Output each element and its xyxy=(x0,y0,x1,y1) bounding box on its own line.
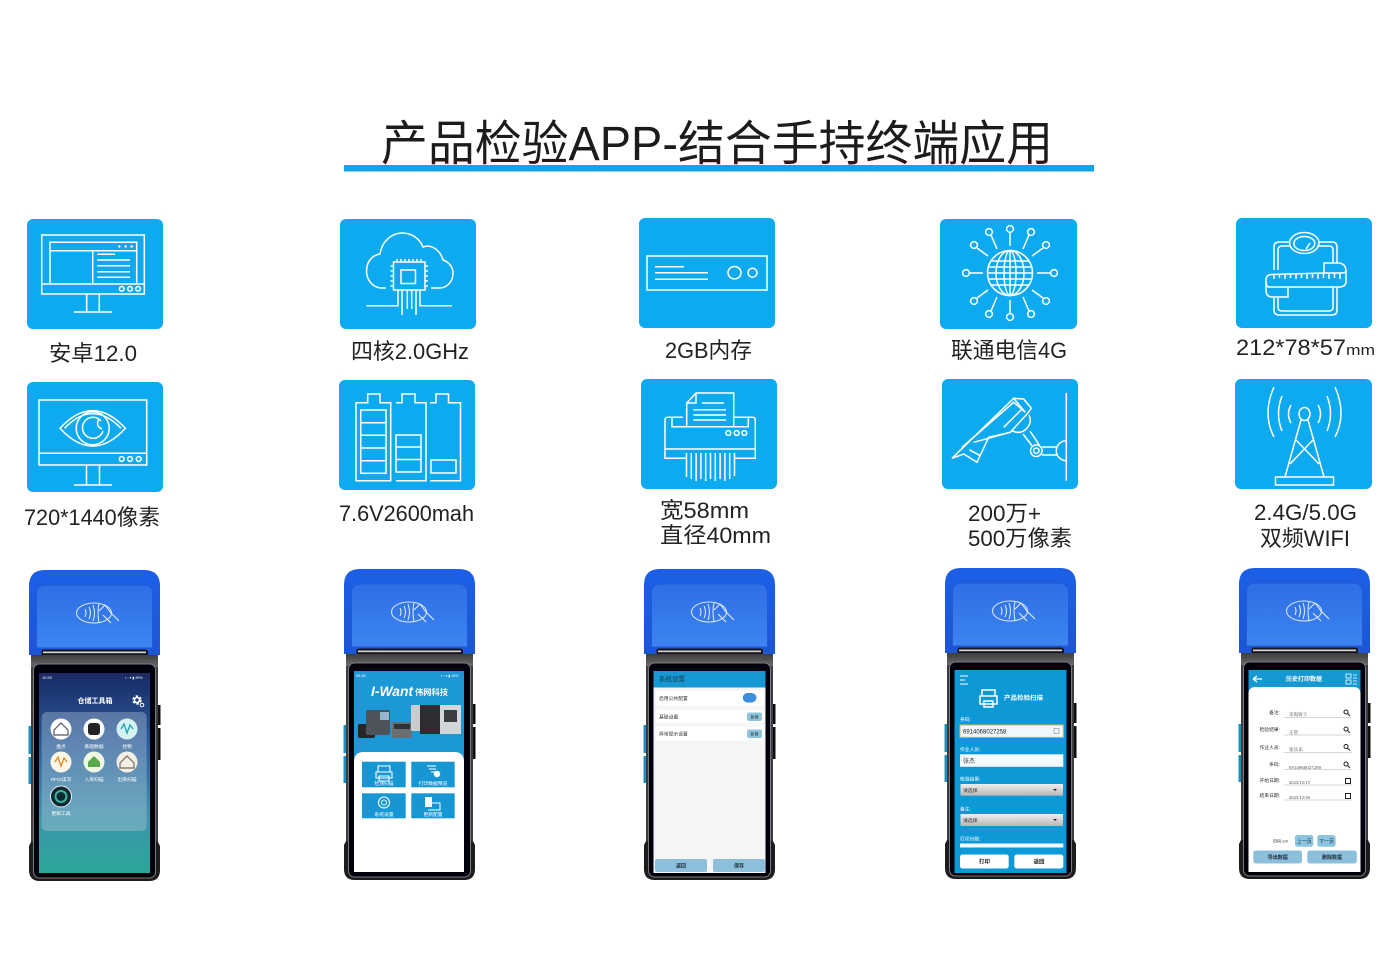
phone screen: I-Want home xyxy=(354,671,464,872)
phone screen: print history: 2023/12/30 xyxy=(1289,795,1311,800)
phone screen: print history: 条码: xyxy=(1269,761,1280,768)
phone screen: system settings: 基础设置 xyxy=(659,714,678,720)
icon: monitor with eye xyxy=(27,382,163,492)
phone screen: I-Want home: 09:38 xyxy=(356,674,366,678)
phone screen: warehouse tools: 仓储工具箱 xyxy=(78,696,112,705)
panel: cpu spec xyxy=(340,219,476,364)
phone screen: print history: 结束日期: xyxy=(1259,792,1280,799)
phone screen: system settings: 新建 xyxy=(750,730,758,736)
icon: monitor with window xyxy=(27,219,163,329)
icon: server box xyxy=(639,218,775,328)
phone screen: print history: 作业人员: xyxy=(1259,744,1280,751)
panel: android version spec xyxy=(27,219,163,366)
panel: phone 5 print history xyxy=(1238,568,1370,879)
icon: cloud chip xyxy=(340,219,476,329)
title: 产品检验APP-结合手持终端应用 xyxy=(381,118,1053,171)
phone screen: warehouse tools: 10:20 xyxy=(42,675,53,680)
label: 2.4G/5.0G xyxy=(1254,500,1357,525)
phone screen: I-Want home: 打印数据预览 xyxy=(419,780,448,787)
phone screen: product inspection scan: 张杰 xyxy=(963,757,975,765)
phone screen: I-Want home: 伟网科技 xyxy=(415,687,448,697)
icon: scale and tape xyxy=(1236,218,1372,328)
phone screen: warehouse tools xyxy=(39,673,150,873)
panel: printing spec xyxy=(641,379,777,548)
phone screen: product inspection scan: 打印 xyxy=(979,858,990,866)
phone screen: product inspection scan: 打印份数: xyxy=(960,836,981,842)
panel: network spec xyxy=(940,219,1077,363)
phone screen: print history: 乐海饼干 xyxy=(1289,711,1308,718)
phone screen: I-Want home: 系统设置 xyxy=(374,811,394,818)
panel: memory spec xyxy=(639,218,775,363)
icon: printer with paper xyxy=(641,379,777,489)
phone screen: warehouse tools: 入库扫描 xyxy=(84,776,104,783)
phone screen: print history: 删除数据 xyxy=(1322,854,1342,861)
phone screen: product inspection scan: 条码: xyxy=(960,716,971,723)
phone screen: print history: 导出数据 xyxy=(1268,854,1288,861)
label: 直径40mm xyxy=(660,523,771,548)
phone screen: print history xyxy=(1248,670,1360,872)
icon: signal tower xyxy=(1235,379,1372,489)
phone screen: warehouse tools: 基础数据 xyxy=(84,743,104,750)
phone screen: product inspection scan xyxy=(954,670,1066,873)
label: 500万像素 xyxy=(968,526,1072,551)
phone screen: system settings: 启用公共配置 xyxy=(659,695,688,702)
label: 宽58mm xyxy=(660,498,749,523)
label: 联通电信4G xyxy=(951,338,1067,363)
phone screen: print history: 页码:1/8 xyxy=(1273,838,1288,844)
phone screen: product inspection scan: 检验结果: xyxy=(960,776,981,782)
panel: phone 1 tool box xyxy=(28,570,160,881)
label: 安卓12.0 xyxy=(49,341,137,366)
phone screen: I-Want home: 更新配置 xyxy=(423,811,443,818)
phone screen: print history: 上一页 xyxy=(1297,838,1312,845)
phone screen: I-Want home: I-Want xyxy=(371,683,414,699)
panel: wifi spec xyxy=(1235,379,1372,551)
panel: phone 4 product scan xyxy=(944,568,1076,879)
label: 7.6V2600mah xyxy=(339,501,474,526)
phone screen: print history: 2023/12/15 xyxy=(1289,780,1311,785)
phone screen: system settings: 保存 xyxy=(734,862,744,870)
phone screen: system settings: 系统设置 xyxy=(659,674,686,683)
phone screen: warehouse tools: 找物 xyxy=(122,743,132,750)
phone screen: warehouse tools: ▪ ◦ ▾ ▮ 89% xyxy=(125,676,143,680)
phone screen: product inspection scan: 备注: xyxy=(960,806,971,812)
label: 212*78*57 xyxy=(1236,335,1346,360)
panel: phone 2 home menu xyxy=(344,569,476,880)
label: 四核2.0GHz xyxy=(351,339,469,364)
panel: resolution spec xyxy=(24,382,163,530)
title underline xyxy=(344,165,1094,172)
label: 双频WIFI xyxy=(1260,526,1350,551)
phone screen: print history: 历史打印数据 xyxy=(1286,675,1322,683)
panel: dimensions spec xyxy=(1236,218,1375,360)
phone screen: system settings: 返回 xyxy=(676,862,686,870)
phone screen: system settings xyxy=(654,671,766,873)
icon: globe network xyxy=(940,219,1077,329)
phone screen: product inspection scan: 作业人员: xyxy=(960,746,981,753)
label: 2GB内存 xyxy=(665,338,752,363)
phone screen: system settings: 新建 xyxy=(750,714,758,720)
phone screen: product inspection scan: 产品检验扫描 xyxy=(1004,694,1043,702)
label: 200万+ xyxy=(968,501,1041,526)
label: 720*1440像素 xyxy=(24,505,160,530)
phone screen: I-Want home: 检测扫描 xyxy=(374,780,394,787)
panel: camera spec xyxy=(942,379,1078,551)
panel: phone 3 settings xyxy=(644,569,776,880)
icon: scanner on arm xyxy=(942,379,1078,489)
phone screen: print history: 张乐乐 xyxy=(1289,746,1303,753)
phone screen: product inspection scan: 返回 xyxy=(1033,858,1045,866)
phone screen: print history: 备注: xyxy=(1269,709,1280,716)
phone screen: product inspection scan: 6914068027258 xyxy=(963,730,1007,736)
phone screen: print history: 下一页 xyxy=(1319,839,1334,845)
phone screen: print history: 6914068027280 xyxy=(1289,765,1322,770)
phone screen: product inspection scan: 请选择 xyxy=(963,817,978,824)
icon: three batteries xyxy=(339,380,475,490)
phone screen: warehouse tools: 盘点 xyxy=(56,743,66,750)
phone screen: product inspection scan: 请选择 xyxy=(963,787,978,794)
phone screen: print history: 开始日期: xyxy=(1259,777,1280,784)
phone screen: warehouse tools: RFID读写 xyxy=(51,776,72,783)
phone screen: print history: 检验结果: xyxy=(1259,726,1280,733)
phone screen: I-Want home: ▪ ◦ ▾ ▮ 26% xyxy=(441,674,459,678)
phone screen: warehouse tools: 更新工具 xyxy=(51,810,71,817)
label unit: mm xyxy=(1346,342,1375,359)
phone screen: print history: 正常 xyxy=(1289,729,1299,736)
phone screen: warehouse tools: 出库扫描 xyxy=(117,776,137,783)
panel: battery spec xyxy=(339,380,475,526)
phone screen: system settings: 异常提示设置 xyxy=(659,730,688,738)
